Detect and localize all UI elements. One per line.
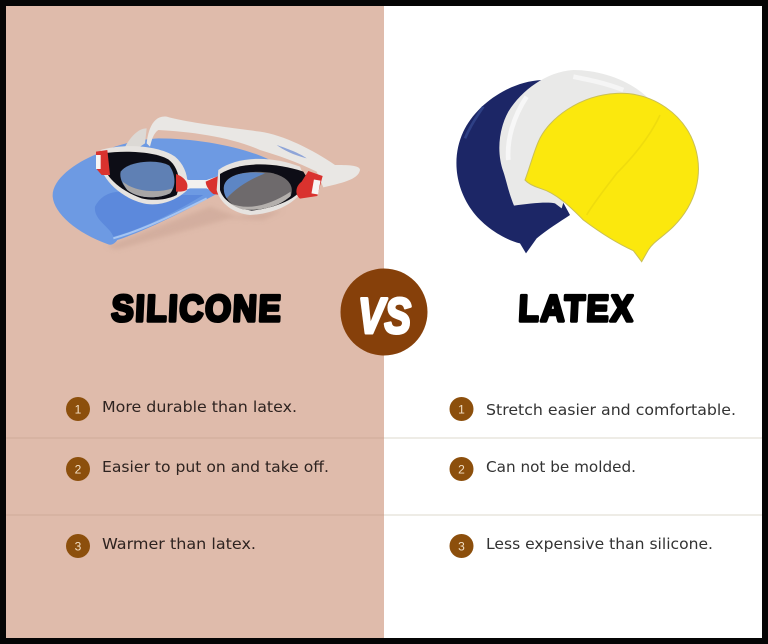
silicone list item 2: Easier to put on and take off. — [102, 458, 329, 476]
silicone list item 1 — [66, 397, 297, 421]
silicone list item 2 — [66, 457, 329, 481]
panel: latex background — [384, 6, 762, 638]
right goggle rim — [217, 159, 307, 215]
silicone list item 2: 2 — [75, 462, 82, 476]
latex list item 2 — [450, 457, 636, 481]
back strap — [147, 117, 360, 187]
right strap clip — [296, 171, 323, 199]
latex list item 2: Can not be molded. — [486, 458, 636, 476]
silicone list item 3: 3 — [75, 540, 82, 554]
nose bridge — [177, 175, 218, 195]
navy cap — [456, 80, 570, 253]
left goggle rim — [101, 146, 187, 204]
latex list item 1 — [450, 397, 736, 421]
soft shadow — [107, 207, 283, 249]
left strap clip — [96, 150, 110, 175]
silver cap — [499, 70, 648, 208]
latex list item 3: 3 — [458, 540, 465, 554]
silicone list item 3 — [66, 534, 256, 558]
heading: latex: LATEX — [518, 288, 634, 329]
right goggle black band — [220, 164, 308, 211]
blue cap — [53, 138, 270, 245]
vs badge: VS — [358, 288, 411, 344]
panel: silicone background — [6, 6, 384, 638]
cap fold — [95, 192, 203, 237]
silicone list item 1: More durable than latex. — [102, 398, 297, 416]
image: three latex swim caps — [456, 70, 698, 262]
right lens — [224, 172, 292, 210]
vs badge — [340, 268, 428, 356]
latex list item 3 — [450, 534, 713, 558]
heading: silicone: SILICONE — [111, 288, 282, 329]
silicone list item 3: Warmer than latex. — [102, 535, 256, 553]
latex list item 3: Less expensive than silicone. — [486, 535, 713, 553]
latex list item 1: 1 — [458, 402, 465, 416]
left lens — [120, 162, 174, 197]
yellow cap — [525, 93, 698, 262]
image: blue silicone cap and swimming goggles — [53, 117, 360, 249]
dividers — [6, 437, 384, 439]
cap highlight — [113, 198, 207, 238]
latex list item 1: Stretch easier and comfortable. — [486, 401, 736, 419]
left goggle black band — [104, 152, 179, 200]
latex list item 2: 2 — [458, 462, 465, 476]
silicone list item 1: 1 — [75, 402, 82, 416]
